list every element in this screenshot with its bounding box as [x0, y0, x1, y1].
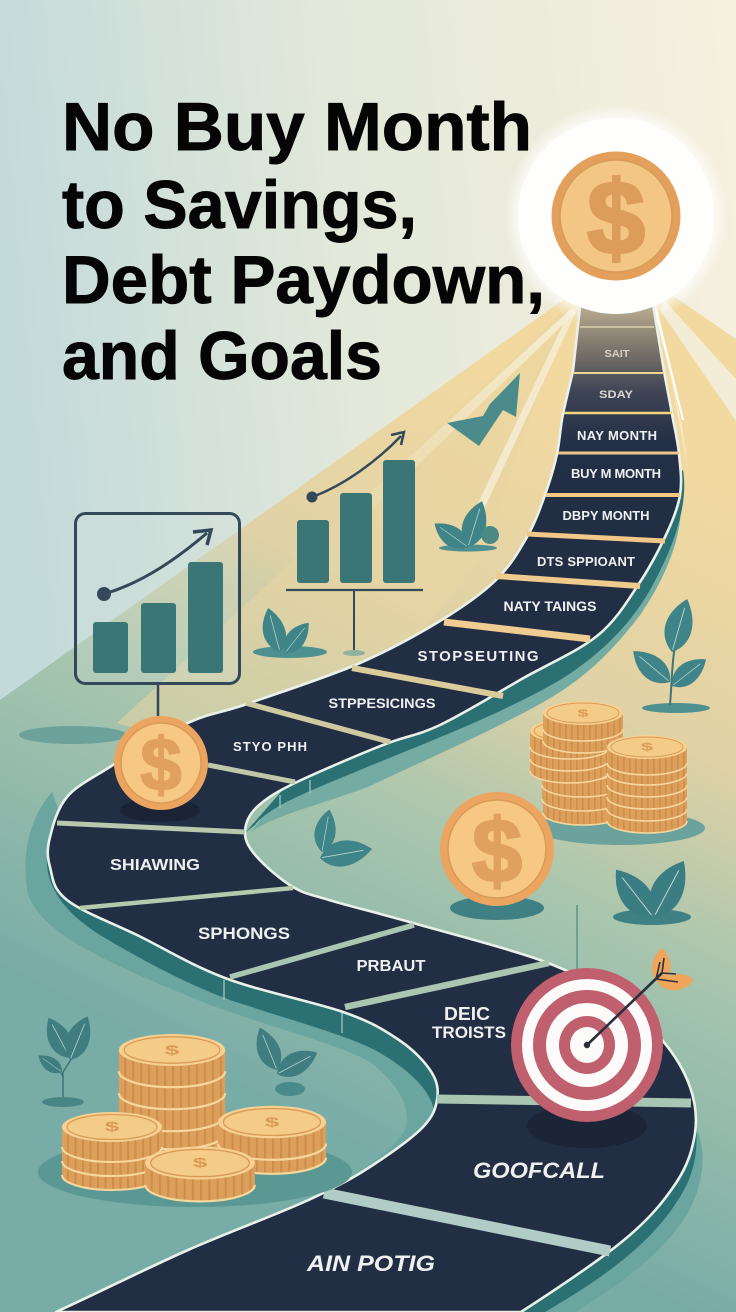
- plant bottom left: [34, 1012, 98, 1107]
- background land wedge: [0, 295, 736, 1312]
- plant lower right: [604, 854, 697, 926]
- coin pile bottom left: $: [105, 1120, 120, 1134]
- coin pile bottom left: [38, 1034, 352, 1207]
- road labels: STPPESICINGS: [328, 695, 436, 711]
- road labels: SHIAWING: [110, 857, 200, 874]
- road labels: GOOFCALL: [473, 1158, 605, 1183]
- title: [62, 89, 545, 394]
- coin with shadow, middle: $: [472, 802, 522, 902]
- coin stacks right: [530, 701, 705, 845]
- title: Debt Paydown,: [62, 242, 545, 318]
- coin with shadow, middle: [440, 792, 577, 975]
- coin on road: [19, 716, 208, 822]
- coin on road: $: [140, 723, 182, 806]
- road: [48, 298, 696, 1312]
- plant right: [626, 595, 712, 713]
- road labels: AIN POTIG: [306, 1251, 435, 1276]
- sun coin: $: [587, 161, 645, 277]
- road labels: TROISTS: [432, 1023, 506, 1042]
- road labels: BUY M MONTH: [571, 466, 661, 481]
- title: and Goals: [62, 318, 382, 394]
- sun rays: [117, 300, 736, 780]
- road labels: SPHONGS: [198, 924, 290, 943]
- road labels: SAIT: [604, 349, 630, 360]
- road labels: NATY TAINGS: [504, 598, 596, 614]
- road labels: DTS SPPIOANT: [537, 554, 635, 569]
- road labels: STYO PHH: [233, 739, 307, 754]
- road labels: SDAY: [599, 389, 634, 401]
- road labels: DBPY MONTH: [562, 508, 650, 523]
- target with arrow: [511, 948, 693, 1148]
- road labels: STOPSEUTING: [418, 648, 538, 665]
- coin pile bottom left: $: [193, 1156, 208, 1170]
- coin stacks right: $: [641, 740, 654, 753]
- road labels: [110, 349, 661, 1276]
- coin stacks right: $: [577, 708, 589, 719]
- plant inside curve: [311, 808, 374, 870]
- road labels: NAY MONTH: [577, 428, 657, 443]
- title: to Savings,: [62, 167, 417, 243]
- title: No Buy Month: [62, 89, 532, 165]
- road step dividers: [57, 327, 691, 1251]
- chart: framed bar chart: [76, 514, 240, 716]
- road labels: DEIC: [444, 1004, 490, 1024]
- chart: bar chart on stand: [286, 432, 423, 656]
- coin pile bottom left: $: [165, 1043, 180, 1058]
- road labels: PRBAUT: [356, 958, 426, 975]
- plant near arrow: [429, 498, 499, 555]
- plant by stand: [253, 605, 327, 659]
- road side wall: [25, 470, 703, 1312]
- plant by stack: [249, 1024, 322, 1096]
- glow around sun: [504, 104, 728, 328]
- paper arrow icon: [447, 373, 520, 446]
- coin pile bottom left: $: [265, 1115, 280, 1130]
- sun coin: [518, 118, 714, 314]
